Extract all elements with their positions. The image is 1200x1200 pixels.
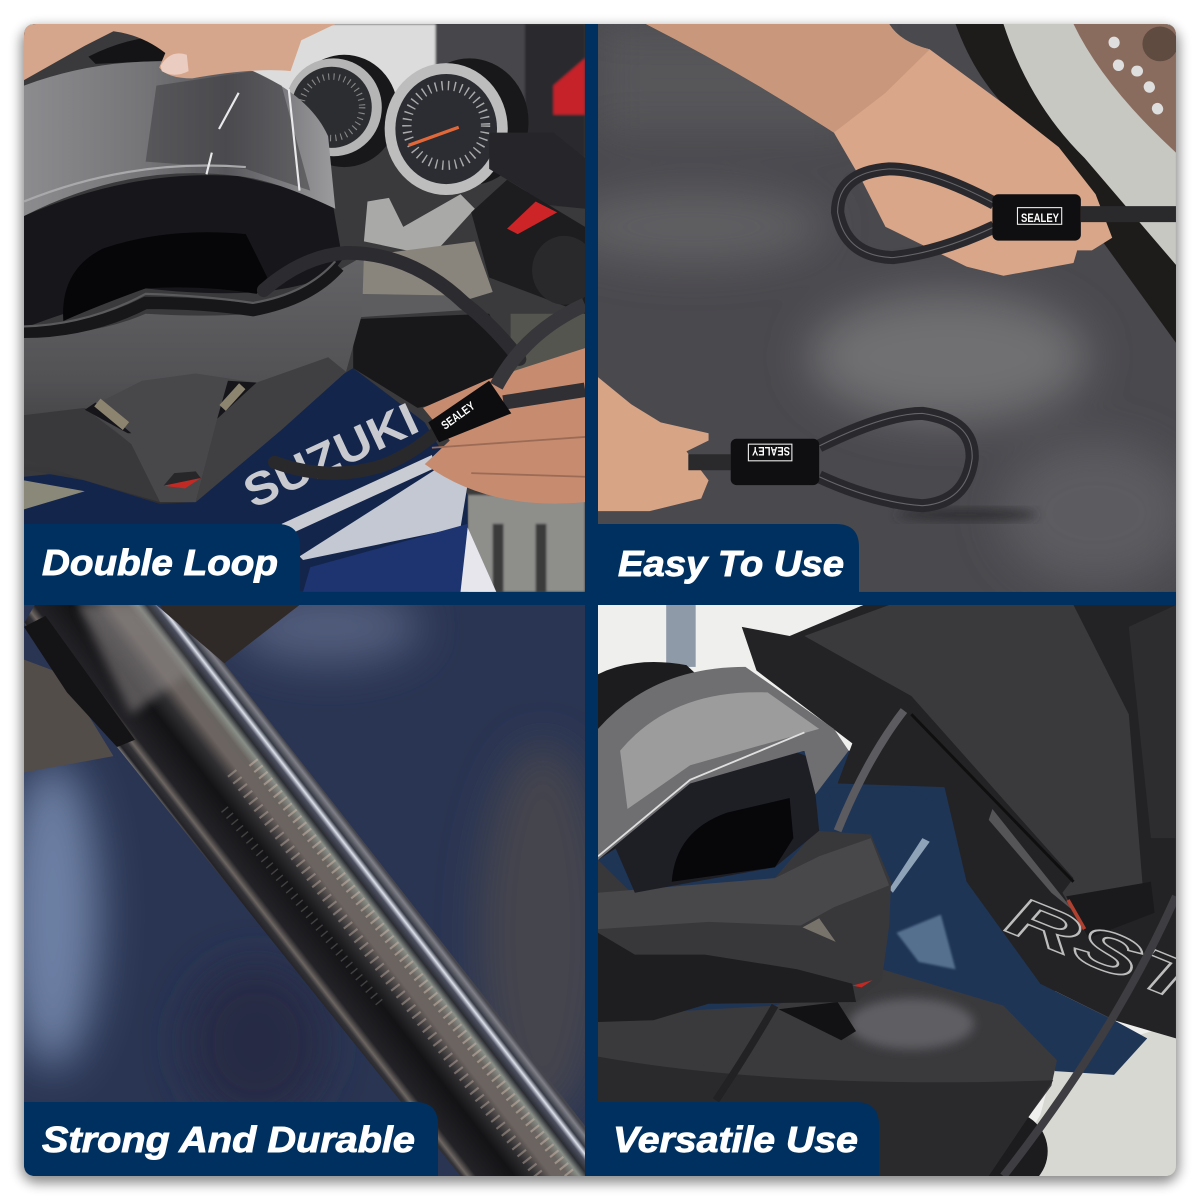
label: double loop: [24, 524, 300, 592]
helmet rim: [24, 267, 339, 332]
tank: [827, 787, 1147, 1075]
lower hand: [598, 377, 709, 511]
lower sleeve: [731, 439, 819, 485]
helmet body: [598, 831, 891, 1022]
helmet: [598, 662, 891, 1022]
seat: [598, 969, 1057, 1176]
visor: [598, 667, 849, 860]
dark backdrop: [598, 751, 1055, 1042]
jacket logo: RST: [999, 883, 1200, 1019]
helmet interior: [24, 175, 342, 328]
panel: easy to use: [561, 24, 1191, 592]
panel: double loop: [24, 24, 596, 592]
label: versatile use: Versatile Use: [613, 1119, 858, 1160]
cable loop: [496, 305, 585, 402]
label: strong and durable: [24, 1102, 438, 1176]
sleeve logo: SEALEY: [439, 399, 478, 432]
helmet chin: [24, 256, 364, 504]
cable closeup: [24, 605, 585, 1176]
motorcycle wheel: [956, 24, 1178, 343]
visor: [24, 61, 335, 216]
wall pole: [666, 605, 696, 667]
helmet interior: [613, 747, 819, 893]
rear wheel: [967, 1111, 1048, 1191]
upper hands: [24, 24, 335, 80]
large gauge: [385, 58, 528, 195]
upper logo text: SEALEY: [1021, 211, 1059, 225]
lower logo box: [748, 444, 792, 461]
jacket: [742, 605, 1176, 1038]
floor shadow: [897, 508, 1037, 521]
panel: strong and durable: [6, 590, 607, 1176]
panel: versatile use: [598, 605, 1200, 1191]
label: easy to use: [586, 524, 859, 592]
cables: [716, 711, 1176, 1176]
upper sleeve: [992, 194, 1081, 241]
fuel tank: [24, 368, 496, 592]
tank logo: SUZUKI: [235, 392, 426, 518]
garage background: [239, 24, 585, 592]
fabric: [24, 605, 300, 773]
motorcycle frame: [1003, 1024, 1176, 1176]
cables: [264, 253, 520, 473]
lower cable loop: [688, 413, 972, 506]
upper cable loop: [838, 169, 1176, 258]
blurred background: [24, 605, 585, 1112]
label: strong and durable: Strong And Durable: [42, 1119, 415, 1160]
lower logo text: SEALEY: [752, 444, 790, 458]
handlebar controls: [353, 133, 596, 408]
helmet shell facets: [24, 408, 160, 502]
floor sheen: [561, 24, 1191, 585]
helmet: [24, 35, 364, 504]
label: double loop: Double Loop: [42, 542, 278, 583]
label: easy to use: Easy To Use: [618, 543, 844, 584]
upper logo box: [1017, 208, 1062, 224]
lower hand: [423, 348, 585, 504]
upper hand and arm: [646, 24, 1112, 276]
label: versatile use: [586, 1102, 879, 1176]
small gauge: [285, 55, 398, 167]
cable sleeve: [428, 381, 511, 442]
